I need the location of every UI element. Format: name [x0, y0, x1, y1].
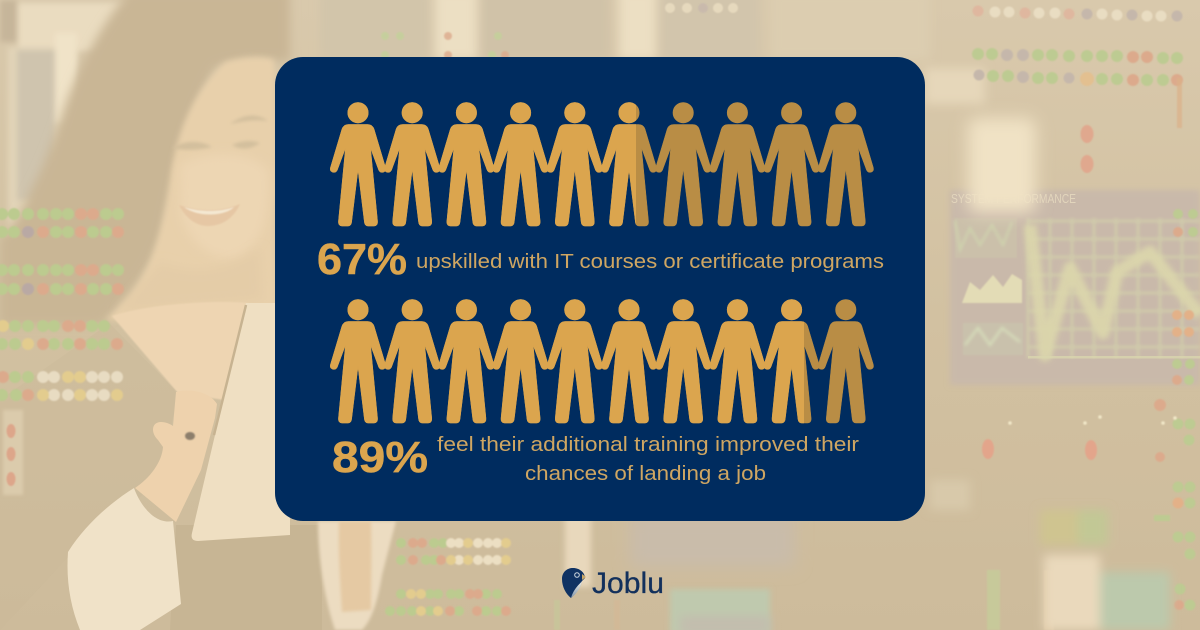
right lower lights [982, 209, 1198, 630]
lower middle status LEDs [385, 538, 620, 630]
panel: statistics card [275, 57, 925, 521]
bright blurred column over monitor [968, 118, 1036, 213]
pictogram: 67 percent row of ten people [330, 103, 874, 226]
right status LEDs [972, 6, 1183, 173]
upper right wall [925, 68, 985, 104]
left sleeve [68, 488, 181, 630]
lower middle: monitor reflection, cream column and teal screen [565, 515, 795, 630]
right sleeve and arm [318, 521, 396, 630]
face and neck [106, 57, 278, 320]
caption: additional training: chances of landing a job [525, 462, 766, 485]
caption: additional training [437, 433, 859, 485]
chest [112, 302, 248, 400]
icon: Joblu bird pin [562, 568, 586, 598]
tablet [192, 303, 290, 541]
eyes and brows [172, 116, 268, 150]
logo wordmark: Joblu [592, 567, 664, 600]
system performance monitor [950, 190, 1200, 385]
stat: 89%: 89% [332, 433, 428, 482]
caption: additional training: feel their additional training improved their [437, 433, 859, 456]
left status LEDs [0, 208, 124, 401]
hand [135, 390, 217, 522]
smile [179, 204, 240, 226]
system performance monitor: SYSTEM PERFORMANCE [951, 191, 1076, 206]
hair [0, 0, 290, 325]
stat: 67%: 67% [317, 235, 407, 284]
top strip behind card [320, 0, 930, 60]
top left door and wall [0, 0, 133, 237]
logo: Joblu [562, 567, 664, 600]
dress [0, 320, 178, 630]
caption: upskilled: upskilled with IT courses or certificate programs [416, 250, 884, 273]
pictogram: 89 percent row of ten people [330, 300, 874, 423]
